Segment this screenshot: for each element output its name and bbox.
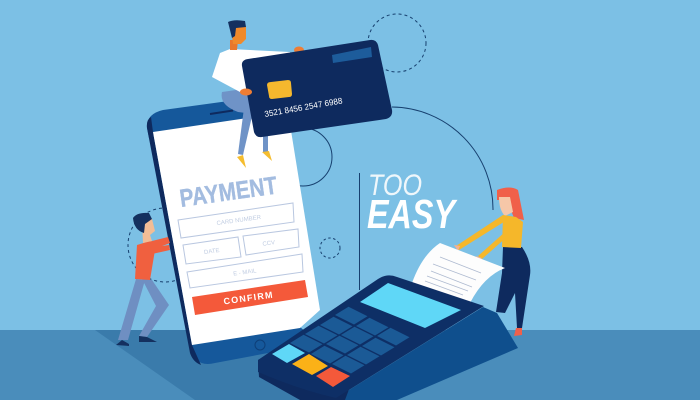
face: [231, 26, 246, 44]
chip: [267, 80, 292, 99]
shirt: [502, 215, 523, 248]
field: card number: [178, 203, 294, 238]
front leg: [238, 108, 253, 155]
floor: [0, 330, 700, 400]
dashed circle: top right: [368, 14, 426, 72]
man pushing phone: [116, 213, 170, 346]
trousers: [496, 247, 530, 328]
second leg: [263, 130, 268, 152]
neck: [230, 40, 238, 50]
field: date: [183, 237, 241, 264]
key: cyan: [272, 344, 305, 363]
payment title: PAYMENT: [178, 172, 279, 213]
field: email: E - MAIL: [233, 268, 257, 278]
printed lines: [425, 257, 481, 295]
thigh: [222, 88, 262, 115]
shoes: [237, 151, 272, 168]
credit card: [240, 40, 392, 137]
headline: [367, 169, 458, 237]
shirt: [135, 241, 155, 280]
card number: 3521 8456 2547 6988: [264, 95, 343, 119]
phone left edge: [147, 117, 201, 365]
man sitting on phone: [212, 20, 304, 168]
hair: [228, 20, 246, 38]
headline line: too: TOO: [368, 169, 422, 202]
key: red: [316, 367, 350, 387]
large arc: [392, 107, 493, 210]
phone screen: [153, 112, 320, 345]
home button: [255, 340, 265, 350]
face: [499, 197, 513, 216]
field: email: [187, 254, 303, 288]
paper: [412, 243, 505, 303]
hair: [133, 213, 152, 233]
legs: [118, 279, 169, 340]
front base: [258, 340, 360, 400]
headline line: easy: EASY: [367, 191, 458, 237]
keypad: [290, 307, 410, 374]
magnetic stripe: [332, 47, 372, 63]
shoe: [514, 328, 522, 336]
receipt: [412, 243, 505, 303]
arms: [456, 215, 508, 259]
shoes: [116, 336, 157, 346]
phone top band: [147, 94, 290, 138]
hair: [497, 188, 524, 220]
key: yellow: [292, 354, 328, 375]
dashed circle: behind left man: [128, 208, 202, 282]
confirm button: [192, 280, 308, 315]
woman pulling receipt: [454, 188, 530, 336]
field: cvv: [243, 229, 299, 255]
screen: [360, 283, 461, 328]
key row 2: [311, 318, 388, 364]
card terminal: [258, 275, 518, 400]
hands: [454, 245, 482, 262]
key row 1: [290, 307, 368, 352]
field: card number: CARD NUMBER: [216, 215, 262, 227]
confirm button: CONFIRM: [223, 290, 274, 306]
right housing: [333, 307, 518, 400]
head: [142, 219, 155, 243]
circle outline behind phone: [274, 128, 332, 186]
arms: [148, 237, 170, 254]
speaker: [210, 110, 233, 114]
dashed circle: small: [320, 238, 340, 258]
shirt: [212, 49, 290, 92]
top face: [258, 275, 484, 398]
vertical divider: [359, 173, 360, 290]
field: cvv: CCV: [262, 240, 276, 248]
key row 3: [332, 328, 410, 374]
field: date: DATE: [204, 248, 220, 256]
smartphone: [147, 94, 320, 365]
card body: [242, 40, 392, 137]
hand on card front: [240, 88, 252, 96]
hand on card: [294, 46, 304, 54]
floor shadow: [95, 330, 340, 400]
phone bottom band: [190, 327, 306, 364]
